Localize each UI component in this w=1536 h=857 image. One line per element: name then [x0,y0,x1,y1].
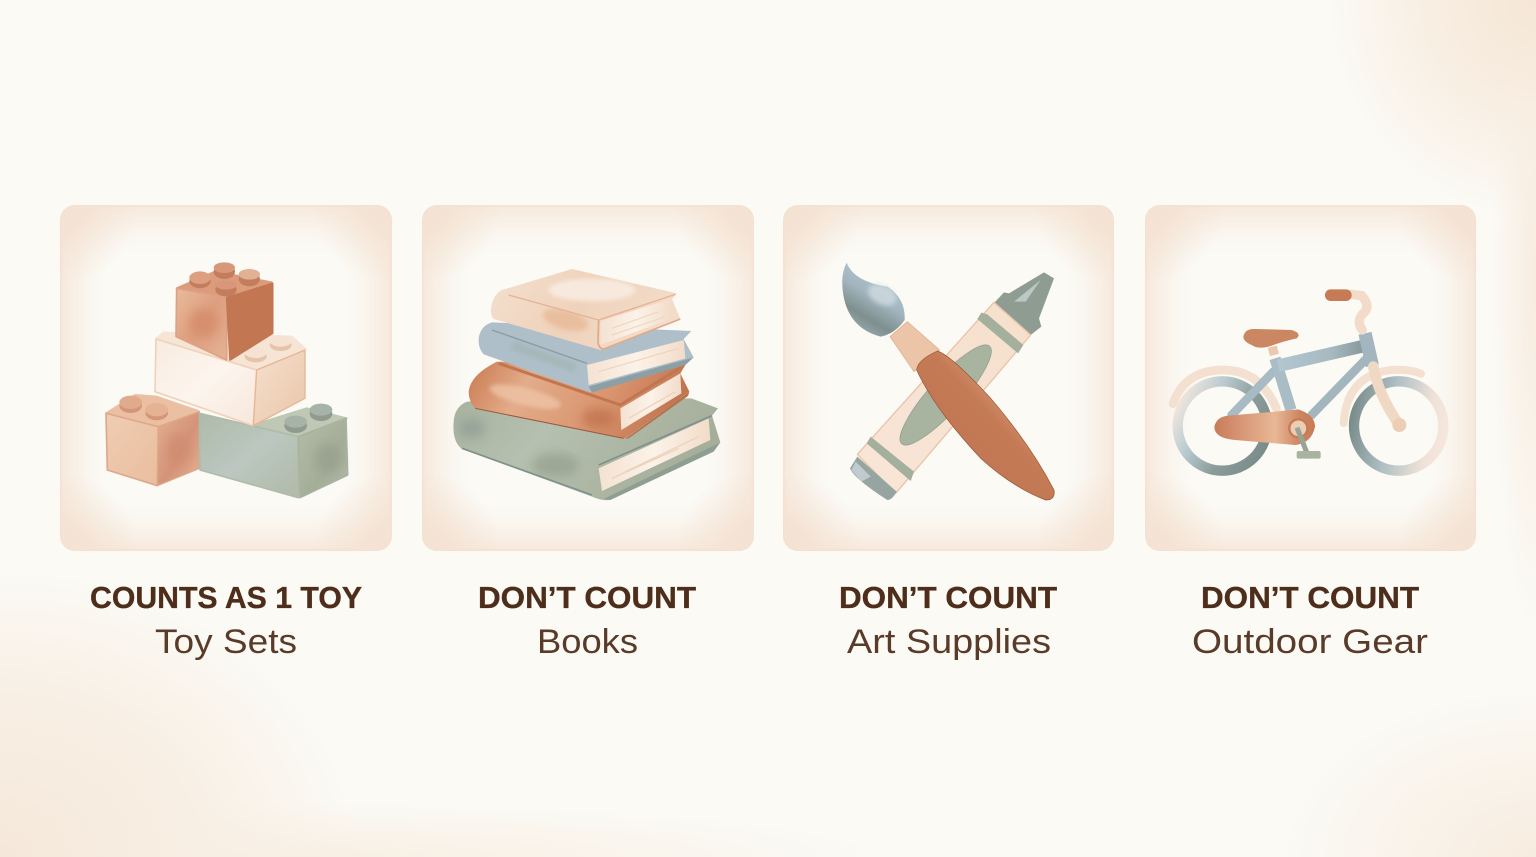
frame [1232,294,1399,425]
blue book [479,322,694,392]
fork end [1392,418,1406,432]
label: don't count, books: Books [537,623,638,661]
label: don't count, outdoor gear [1192,580,1428,661]
icon: stacked toy building blocks [105,262,348,498]
green book [453,398,720,500]
label: don't count, outdoor gear: DON’T COUNT [1201,580,1419,615]
label: don't count, art supplies: DON’T COUNT [839,580,1057,615]
icon: stack of books [453,269,720,500]
mudguards [1173,370,1421,423]
label: don't count, outdoor gear: Outdoor Gear [1192,623,1428,661]
cream book [491,269,680,350]
label: counts as 1 toy, toy sets [90,580,362,661]
rear wheel [1178,381,1267,471]
card: art supplies [783,205,1114,551]
chain guard [1214,409,1315,445]
top terracotta block [176,262,273,360]
middle cream block [155,333,306,426]
crayon [850,272,1054,500]
label: don't count, books [478,580,696,661]
bottom-left peach block [106,395,199,486]
front wheel [1354,381,1443,471]
panel: books [422,205,754,661]
card: outdoor gear [1145,205,1476,551]
label: don't count, art supplies: Art Supplies [847,623,1051,661]
card: building blocks [60,205,392,551]
icon: crossed paintbrush and crayon [842,262,1055,500]
label: counts as 1 toy, toy sets: COUNTS AS 1 TOY [90,580,362,615]
panel: outdoor gear [1145,205,1476,661]
crank and pedal [1289,419,1321,459]
handlebar grip [1325,289,1352,301]
label: don't count, art supplies [839,580,1057,661]
label: don't count, books: DON’T COUNT [478,580,696,615]
label: counts as 1 toy, toy sets: Toy Sets [155,623,297,661]
panel: art supplies [783,205,1114,661]
card: books [422,205,754,551]
panel: toy sets [60,205,392,661]
saddle [1243,329,1299,348]
paintbrush [842,263,1054,500]
bottom-right green block [199,404,348,498]
icon: bicycle [1168,289,1448,476]
terracotta book [469,362,689,439]
